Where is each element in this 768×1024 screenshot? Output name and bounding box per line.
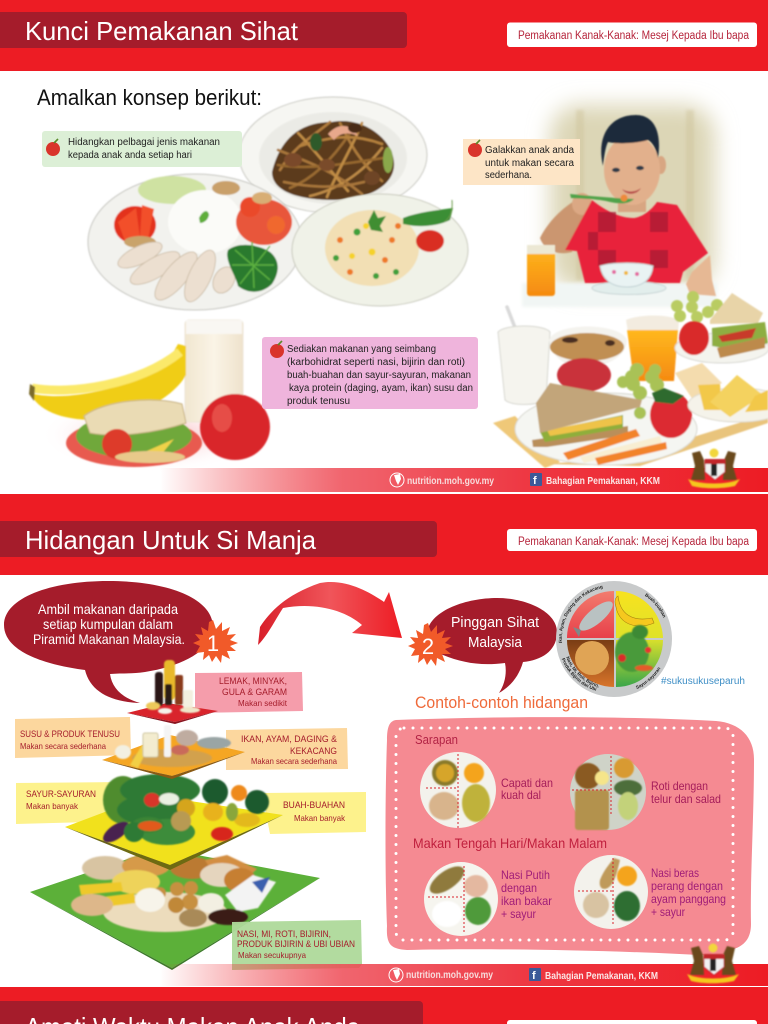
callout: makanan seimbang: (karbohidrat seperti nasi, bijirin dan roti) [287, 357, 465, 368]
meal text: nasi beras perang: Nasi beras [651, 866, 699, 880]
icon: apple [270, 341, 284, 358]
meal text: nasi beras perang: ayam panggang [651, 892, 726, 906]
meal text: nasi putih: + sayur [501, 907, 536, 921]
icon: facebook [529, 968, 541, 982]
callout: makanan seimbang [262, 337, 478, 409]
label: buah-buahan: BUAH-BUAHAN [283, 800, 345, 811]
label: sayur-sayuran [16, 782, 127, 824]
label: ikan ayam daging: Makan secara sederhana [251, 756, 337, 766]
meal plate: capati [420, 752, 496, 828]
header band: Hidangan Untuk Si Manja [25, 525, 317, 555]
header band [0, 0, 768, 71]
callout: galakkan anak: Galakkan anak anda [485, 145, 574, 156]
speech bubble 1: Ambil makanan daripada [38, 601, 178, 617]
chart: pinggan sihat plate: Ikan, Ayam, Daging dan Kekacang [558, 586, 603, 643]
arrow: step 1 to step 2 [258, 582, 402, 645]
label: nasi, mi, roti: Makan secukupnya [238, 950, 306, 960]
label: lemak minyak [195, 672, 303, 713]
chart: pinggan sihat plate: Produk Bijirin dan Ubi [562, 658, 597, 691]
tier: vegetables and fruit [65, 774, 283, 870]
header band [0, 494, 768, 575]
photo: banana, milk, sandwich, apple [29, 320, 270, 473]
panel: hidangan untuk si manja [0, 497, 768, 986]
meal text: roti: telur dan salad [651, 792, 721, 806]
badge: number 2 [408, 623, 453, 666]
label: sayur-sayuran: Makan banyak [26, 801, 79, 811]
icon: coat of arms [688, 448, 740, 488]
callout: galakkan anak [463, 139, 580, 185]
panel: contoh hidangan menu [386, 717, 754, 956]
callout: makanan seimbang: produk tenusu [287, 396, 350, 407]
meal text: nasi putih: ikan bakar [501, 894, 552, 908]
label: susu dan produk tenusu: SUSU & PRODUK TENUSU [20, 729, 120, 740]
photo: rice and chicken plate [88, 174, 302, 310]
callout: galakkan anak: sederhana. [485, 170, 532, 181]
callout: makanan seimbang: kaya protein (daging, ayam, ikan) susu dan [289, 383, 473, 394]
chart: pinggan sihat plate: Buah-buahan [644, 593, 666, 618]
badge: number 1 [193, 620, 238, 663]
meal text: roti [651, 779, 721, 806]
label: nasi, mi, roti: NASI, MI, ROTI, BIJIRIN, [237, 929, 331, 940]
chart: pinggan sihat plate: Sayur-sayuran [636, 668, 660, 689]
panel: kunci pemakanan sihat [0, 0, 768, 497]
label: lemak minyak: GULA & GARAM [222, 687, 287, 698]
speech bubble 2: Pinggan Sihat [451, 614, 540, 631]
footer: website and facebook [160, 944, 768, 986]
heading: amalkan konsep: Amalkan konsep berikut: [37, 85, 262, 110]
icon: facebook: f [533, 475, 537, 487]
label: susu dan produk tenusu: Makan secara sederhana [20, 741, 106, 751]
speech bubble 1: Piramid Makanan Malaysia. [33, 631, 185, 647]
label: ikan ayam daging [226, 728, 348, 770]
photo: noodle plate [239, 97, 427, 213]
speech bubble 2: Malaysia [468, 634, 523, 651]
icon: banana [615, 596, 654, 626]
label: buah-buahan: Makan banyak [294, 813, 346, 823]
photo: fried rice plate [292, 194, 468, 306]
label: lemak minyak: Makan sedikit [238, 698, 288, 708]
label: lemak minyak: LEMAK, MINYAK, [219, 676, 287, 687]
label: susu dan produk tenusu [15, 717, 131, 758]
footer: website and facebook: nutrition.moh.gov.my [406, 969, 493, 981]
icon: vegetables [615, 625, 653, 672]
icon: facebook [530, 473, 542, 487]
icon: globe [389, 968, 403, 982]
meal text: roti: Roti dengan [651, 779, 708, 793]
meal text: nasi beras perang [651, 866, 726, 919]
icon: apple [468, 140, 482, 157]
heading: sarapan: Sarapan [415, 732, 458, 747]
photo: boy eating [522, 105, 717, 307]
label: ikan ayam daging: IKAN, AYAM, DAGING & [241, 734, 338, 745]
header band: Kunci Pemakanan Sihat [25, 16, 299, 46]
label: nasi, mi, roti: PRODUK BIJIRIN & UBI UBIAN [237, 939, 355, 950]
label: sayur-sayuran: SAYUR-SAYURAN [26, 789, 96, 800]
callout: hidangkan pelbagai jenis [42, 131, 242, 167]
speech bubble 1: setiap kumpulan dalam [43, 616, 173, 632]
panel: next section header [0, 987, 768, 1024]
callout: hidangkan pelbagai jenis: Hidangkan pelbagai jenis makanan [68, 137, 220, 148]
speech bubble 2 [427, 598, 557, 693]
footer: website and facebook: Bahagian Pemakanan, KKM [546, 475, 660, 487]
meal plate: nasi beras perang [574, 855, 648, 929]
badge: number 2: 2 [422, 634, 434, 659]
meal text: nasi putih: dengan [501, 881, 537, 895]
food pyramid [30, 660, 320, 970]
meal text: capati: Capati dan [501, 776, 553, 790]
photo: breakfast spread [493, 291, 768, 468]
hashtag: #sukusukuseparuh [661, 676, 745, 687]
meal text: nasi putih [501, 868, 552, 921]
label: buah-buahan [262, 792, 366, 834]
icon: facebook: f [532, 970, 536, 982]
chart: pinggan sihat plate: Nasi, Mi, Roti, Bijirin, [566, 656, 598, 688]
callout: makanan seimbang: Sediakan makanan yang seimbang [287, 344, 436, 355]
tier: protein and dairy [102, 725, 245, 779]
meal plate: nasi putih [424, 861, 498, 936]
icon: coat of arms [687, 944, 739, 983]
footer: website and facebook: Bahagian Pemakanan, KKM [545, 970, 658, 982]
icon: globe [390, 473, 404, 487]
icon: fish [573, 597, 617, 637]
meal text: nasi beras perang: + sayur [651, 905, 685, 919]
meal plate: roti [570, 754, 646, 830]
tier: grains [30, 848, 320, 970]
speech bubble 1 [4, 581, 213, 703]
icon: rice patty [575, 641, 609, 675]
footer: website and facebook: nutrition.moh.gov.my [407, 475, 494, 487]
heading: makan tengah hari: Makan Tengah Hari/Makan Malam [413, 835, 607, 851]
icon: apple [46, 139, 60, 156]
label: nasi, mi, roti [232, 920, 362, 970]
callout: galakkan anak: untuk makan secara [485, 158, 574, 169]
meal text: nasi putih: Nasi Putih [501, 868, 550, 882]
footer: website and facebook [0, 448, 768, 497]
heading: contoh hidangan: Contoh-contoh hidangan [415, 693, 588, 712]
meal text: capati [501, 776, 553, 802]
meal text: capati: kuah dal [501, 788, 541, 802]
meal text: nasi beras perang: perang dengan [651, 879, 723, 893]
tier: fats and sugar [127, 660, 218, 724]
chart: pinggan sihat plate [556, 581, 672, 697]
callout: hidangkan pelbagai jenis: kepada anak anda setiap hari [68, 150, 192, 161]
callout: makanan seimbang: buah-buahan dan sayur-sayuran, makanan [287, 370, 471, 381]
label: ikan ayam daging: KEKACANG [290, 746, 337, 757]
badge: number 1: 1 [207, 631, 219, 656]
